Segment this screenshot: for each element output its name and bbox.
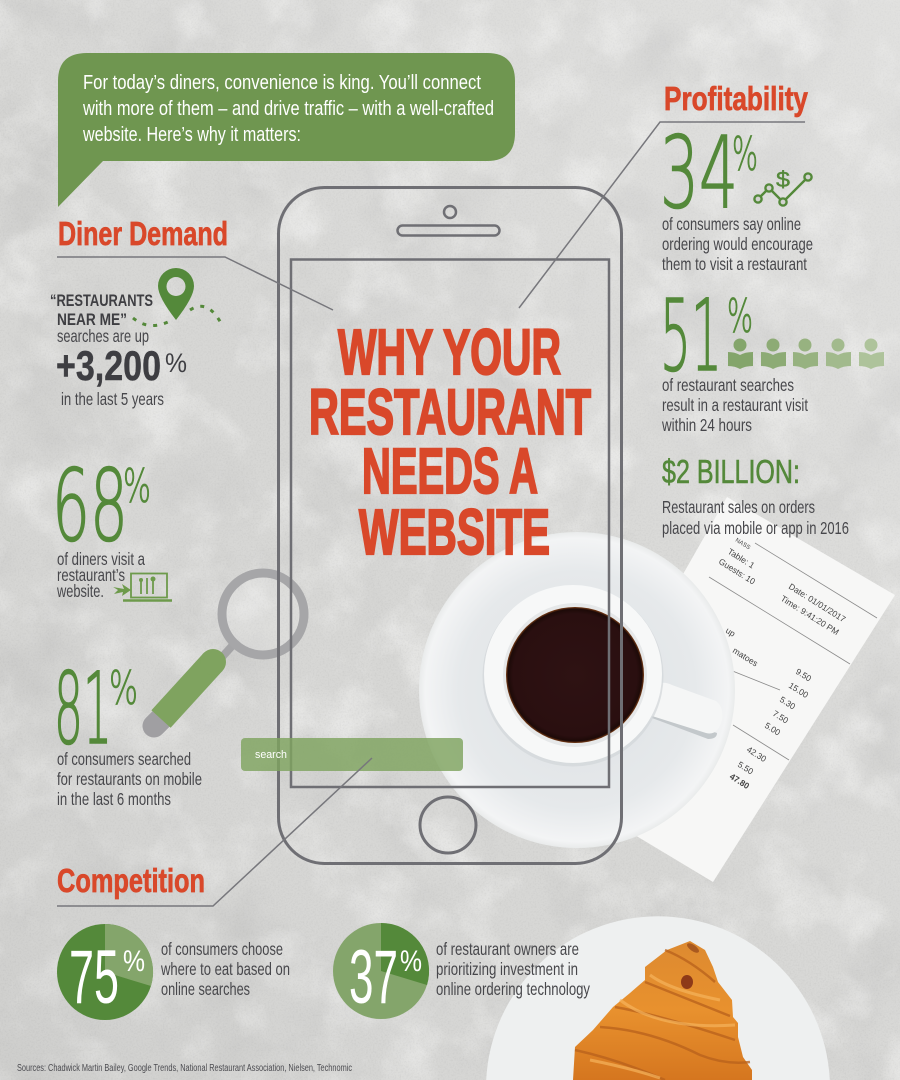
speech bubble intro: For today’s diners, convenience is king. You’ll connect [83, 72, 481, 94]
coffee cup and saucer photo [419, 532, 735, 848]
receipt photo: matoes [731, 645, 760, 668]
stat: 34 percent [660, 116, 813, 274]
text: 75 percent caption: of consumers choose [161, 939, 283, 959]
receipt photo: 5.50 [736, 759, 756, 777]
stat: 34 percent: them to visit a restaurant [662, 254, 807, 274]
icon: map pin with dotted path [133, 268, 222, 326]
stat: restaurants near me: searches are up [57, 326, 149, 346]
pie chart: 75 percent: 75 [69, 935, 119, 1020]
receipt photo: Table: 1 [726, 546, 757, 571]
stat: restaurants near me: “RESTAURANTS [50, 291, 153, 310]
text: 37 percent caption: prioritizing investment in [436, 959, 578, 979]
heading: profitability: Profitability [664, 81, 808, 118]
stat: 51 percent [660, 279, 808, 435]
receipt photo: 42.30 [745, 744, 769, 764]
pie chart: 75 percent: % [123, 945, 145, 978]
leader line: profitability [519, 122, 805, 308]
stat: 81 percent: 81 [54, 652, 112, 767]
stat: restaurants near me: +3,200 [56, 342, 161, 389]
stat: 34 percent: 34 [660, 116, 738, 231]
title: RESTAURANT [309, 376, 591, 448]
stat: 81 percent: for restaurants on mobile [57, 769, 202, 789]
speech bubble intro: with more of them – and drive traffic – with a well-crafted [82, 98, 494, 120]
stat: 51 percent: of restaurant searches [662, 375, 794, 395]
text: 75 percent caption [160, 939, 290, 999]
stat: 51 percent: within 24 hours [661, 415, 752, 435]
text: 37 percent caption: of restaurant owners are [436, 939, 579, 959]
pie chart: 37 percent: 37 [349, 935, 398, 1020]
receipt photo: 9.50 [794, 666, 814, 684]
icon: line chart with dollar: $ [776, 167, 790, 192]
panel: profitability [519, 81, 884, 538]
receipt photo: 7.50 [771, 708, 791, 726]
receipt photo: 5.00 [763, 720, 783, 738]
title: WEBSITE [359, 496, 550, 568]
icon: row of readers [728, 338, 884, 369]
heading: competition: Competition [57, 863, 205, 900]
icon: line chart with dollar [754, 167, 812, 206]
phone outline [278, 188, 622, 864]
receipt photo [560, 497, 895, 882]
panel: diner demand [50, 216, 333, 809]
receipt photo: Date: 01/01/2017 [787, 581, 848, 624]
leader line: competition [57, 758, 372, 906]
title [309, 316, 591, 568]
pie chart: 37 percent: % [400, 945, 422, 978]
receipt photo: Guests: 10 [717, 556, 757, 587]
stat: restaurants near me [50, 291, 187, 409]
receipt photo: 5.30 [778, 694, 798, 712]
icon: laptop with cutlery [113, 574, 172, 600]
stat: 2 billion [662, 453, 849, 538]
title: WHY YOUR [338, 316, 561, 388]
stat: 81 percent: in the last 6 months [57, 789, 171, 809]
magnifying glass icon [154, 573, 304, 726]
stat: 68 percent [52, 449, 151, 601]
panel: competition [57, 758, 590, 1020]
stat: 34 percent: % [732, 127, 758, 181]
receipt photo: 47.80 [728, 771, 752, 791]
stat: 68 percent: 68 [52, 449, 128, 564]
text: 75 percent caption: online searches [161, 979, 250, 999]
stat: 51 percent: % [727, 289, 753, 343]
receipt photo: 15.00 [787, 680, 811, 700]
leader line: diner demand [57, 257, 333, 310]
speech bubble intro [58, 53, 515, 207]
stat: 2 billion: Restaurant sales on orders [662, 497, 815, 517]
croissant plate photo [486, 916, 830, 1080]
stat: 81 percent: % [109, 661, 138, 715]
search bar: search [255, 749, 287, 761]
stat: 34 percent: ordering would encourage [662, 234, 813, 254]
stat: 51 percent: result in a restaurant visit [662, 395, 808, 415]
stat: 68 percent: website. [56, 581, 104, 601]
stat: 68 percent: restaurant’s [57, 565, 125, 585]
stat: restaurants near me: NEAR ME” [57, 310, 127, 329]
croissant [573, 941, 752, 1080]
search bar [241, 738, 463, 771]
stat: restaurants near me: in the last 5 years [61, 389, 164, 409]
text: 75 percent caption: where to eat based on [160, 959, 290, 979]
text: 37 percent caption [436, 939, 590, 999]
stat: 68 percent: % [123, 459, 151, 513]
text: 37 percent caption: online ordering technology [436, 979, 590, 999]
title: NEEDS A [362, 435, 538, 507]
sources footnote: Sources: Chadwick Martin Bailey, Google Trends, National Restaurant Association, Nielsen, Technomic [17, 1063, 352, 1074]
receipt photo: Time: 9:41:20 PM [779, 593, 841, 637]
receipt photo: NASS [734, 538, 751, 551]
heading: diner demand: Diner Demand [58, 216, 228, 253]
stat: 81 percent: of consumers searched [57, 749, 191, 769]
stat: restaurants near me: % [165, 348, 187, 378]
speech bubble intro: website. Here’s why it matters: [82, 124, 301, 146]
stat: 2 billion: $2 BILLION: [662, 453, 800, 490]
stat: 68 percent: of diners visit a [57, 549, 145, 569]
stat: 51 percent: 51 [660, 279, 722, 394]
receipt photo: up [724, 625, 737, 639]
stat: 81 percent [54, 652, 202, 809]
stat: 34 percent: of consumers say online [662, 214, 801, 234]
